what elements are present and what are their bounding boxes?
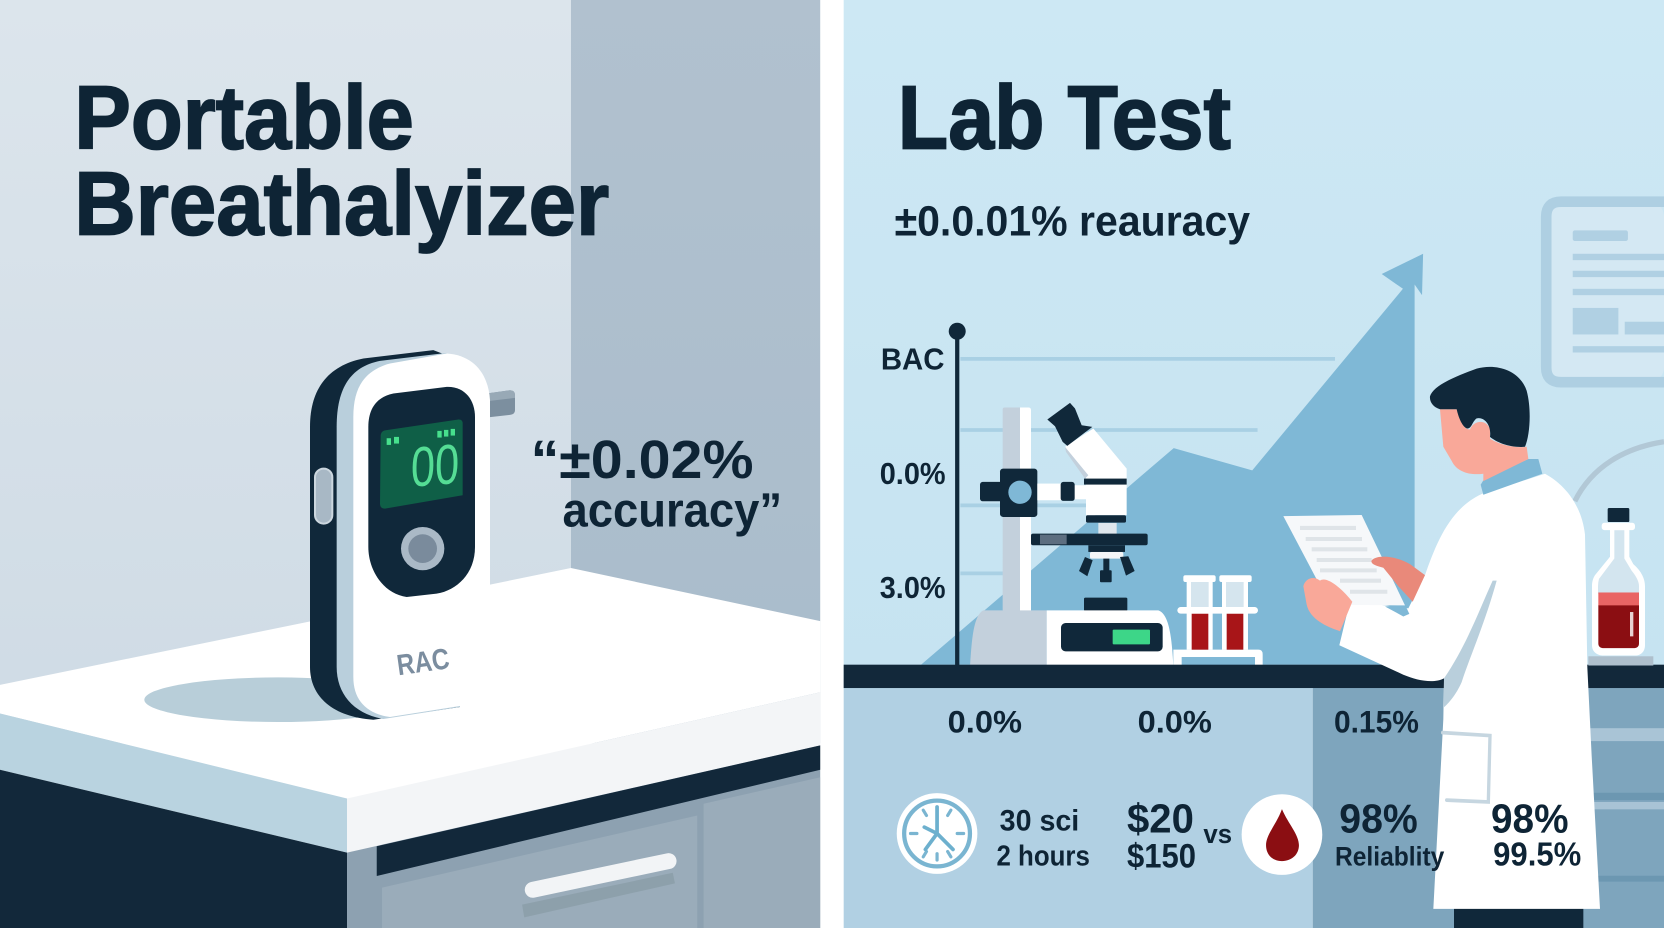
hair bbox=[1430, 367, 1530, 447]
flask of blood bbox=[1588, 508, 1653, 666]
title: Portable Breathalyzer: Breathalyizer bbox=[74, 154, 609, 255]
counter left edge bbox=[0, 714, 347, 853]
right hand bbox=[1371, 557, 1425, 602]
heading: Lab Test: Lab Test bbox=[898, 68, 1231, 169]
icon: blood drop bbox=[1242, 794, 1322, 875]
time comparison: 2 hours bbox=[996, 840, 1090, 872]
time comparison bbox=[996, 804, 1090, 872]
panel: portable breathalyzer bbox=[0, 0, 820, 928]
scientist and bottle bbox=[1283, 367, 1664, 928]
gutter bbox=[820, 0, 844, 928]
cabinet base bbox=[844, 680, 1664, 928]
microscope base bbox=[970, 598, 1173, 666]
axis labels: 3.0% bbox=[880, 570, 946, 605]
device: handheld breathalyzer bbox=[310, 350, 515, 720]
rising area chart with arrow bbox=[921, 254, 1423, 665]
wall arc bbox=[1575, 442, 1664, 501]
reliability stat: Reliablity bbox=[1335, 841, 1445, 871]
accuracy stat on coat: 99.5% bbox=[1493, 835, 1581, 872]
device shadow bbox=[144, 677, 412, 722]
eyepiece bbox=[1047, 403, 1092, 446]
reliability stat bbox=[1335, 795, 1445, 871]
objectives bbox=[1079, 556, 1135, 582]
title: Portable Breathalyzer bbox=[74, 68, 609, 255]
measurement row bbox=[948, 704, 1419, 740]
wall document bbox=[1546, 202, 1664, 382]
dark faceplate bbox=[368, 387, 475, 597]
wall background right bbox=[571, 0, 820, 743]
side button bbox=[315, 469, 332, 524]
measurement row: 0.0% bbox=[1138, 704, 1212, 740]
axis labels: 0.0% bbox=[880, 456, 946, 491]
cost comparison bbox=[1127, 795, 1232, 875]
collar bbox=[1481, 459, 1542, 495]
mouthpiece bbox=[487, 390, 515, 418]
wall background left bbox=[0, 0, 571, 743]
measurement row: 0.0% bbox=[948, 704, 1022, 740]
device side band bbox=[337, 353, 460, 719]
sleeve fold bbox=[1444, 581, 1497, 707]
cost comparison: $150 bbox=[1127, 837, 1196, 875]
accuracy stat on coat bbox=[1491, 795, 1581, 872]
reliability stat: 98% bbox=[1339, 795, 1418, 841]
cost comparison: vs bbox=[1203, 819, 1232, 849]
dark cabinet side bbox=[0, 770, 347, 928]
device front bbox=[353, 354, 490, 717]
time comparison: 30 sci bbox=[1000, 804, 1079, 837]
device back shell bbox=[310, 350, 460, 720]
lab background bbox=[844, 0, 1664, 680]
microscope head bbox=[1065, 429, 1127, 534]
LCD screen bbox=[380, 420, 463, 509]
paper report bbox=[1283, 515, 1409, 616]
cost comparison: $20 bbox=[1127, 795, 1194, 841]
title: Portable Breathalyzer: Portable bbox=[74, 68, 414, 169]
face and neck bbox=[1440, 409, 1528, 481]
icon: clock bbox=[897, 793, 977, 874]
LCD indicators bbox=[387, 429, 455, 445]
BAC axis bbox=[949, 323, 966, 667]
focus block bbox=[980, 469, 1089, 517]
accuracy subheading: ±0.0.01% reauracy bbox=[895, 198, 1250, 245]
accuracy callout bbox=[531, 430, 782, 538]
round button bbox=[401, 527, 444, 570]
column bbox=[1003, 408, 1031, 612]
device label: RAC bbox=[395, 642, 451, 682]
counter right edge bbox=[347, 692, 820, 853]
cabinet front with drawers bbox=[347, 745, 820, 928]
coat pocket bbox=[1443, 733, 1490, 802]
counter top bbox=[0, 568, 820, 798]
axis labels bbox=[880, 341, 946, 605]
test tube rack bbox=[1173, 575, 1263, 666]
left hand bbox=[1303, 578, 1352, 631]
trousers bbox=[1454, 907, 1583, 928]
accuracy stat on coat: 98% bbox=[1491, 795, 1568, 841]
microscope bbox=[970, 403, 1263, 666]
measurement row: 0.15% bbox=[1334, 704, 1419, 740]
panel: lab test bbox=[844, 0, 1664, 928]
dark counter top bbox=[844, 665, 1664, 688]
accuracy callout: “±0.02% bbox=[531, 430, 753, 490]
chart grid lines bbox=[960, 359, 1335, 573]
axis labels: BAC bbox=[881, 341, 944, 377]
stage bbox=[1031, 534, 1148, 559]
cabinet drawer lines bbox=[1588, 728, 1664, 882]
accuracy callout: accuracy” bbox=[562, 485, 782, 538]
LCD reading: 00 bbox=[410, 432, 460, 499]
lab coat bbox=[1339, 474, 1600, 909]
